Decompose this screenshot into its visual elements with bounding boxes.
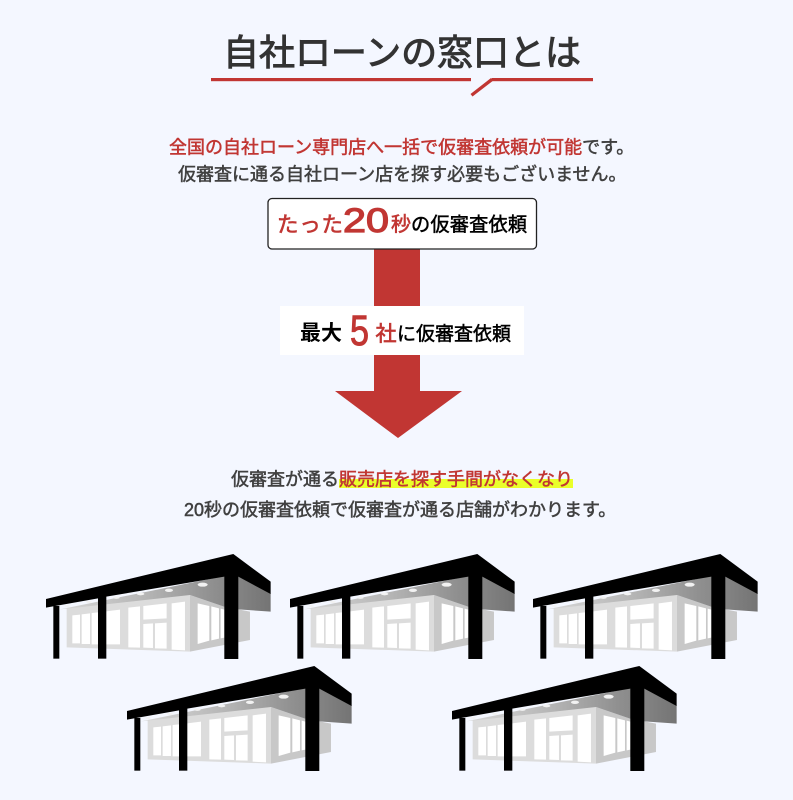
icon: store 3 [533,554,758,659]
title: 自社ローンの窓口とは [223,32,581,73]
callout: 20 second application: 20 [343,202,389,240]
callout: 20 second application: の仮審査依頼 [411,214,527,236]
icon: store 2 [290,554,515,659]
arrow [335,249,462,438]
icon: store 1 [46,554,271,659]
result text [184,470,616,520]
callout: up to 5 companies: 社 [376,323,396,346]
result line 1: 仮審査が通る販売店を探す手間がなくなり [231,470,573,490]
result line 2: 20秒の仮審査依頼で仮審査が通る店舗がわかります。 [184,500,616,520]
icon: store 4 [127,666,352,771]
intro text [169,138,634,184]
title underline with speech notch [211,78,593,96]
callout: up to 5 companies: に仮審査依頼 [397,323,511,345]
callout: up to 5 companies: 最大 [300,322,342,345]
intro line 2: 仮審査に通る自社ローン店を探す必要もございません。 [178,164,627,184]
callout: 20 second application: 秒 [391,213,411,236]
intro line 1: 全国の自社ローン専門店へ一括で仮審査依頼が可能です。 [169,138,634,158]
icon: store 5 [452,666,677,771]
callout: up to 5 companies [280,306,524,355]
callout: up to 5 companies: 5 [350,307,369,355]
highlight marker [339,479,573,488]
callout: 20 second application [268,198,536,249]
callout: 20 second application: たった [277,213,343,237]
